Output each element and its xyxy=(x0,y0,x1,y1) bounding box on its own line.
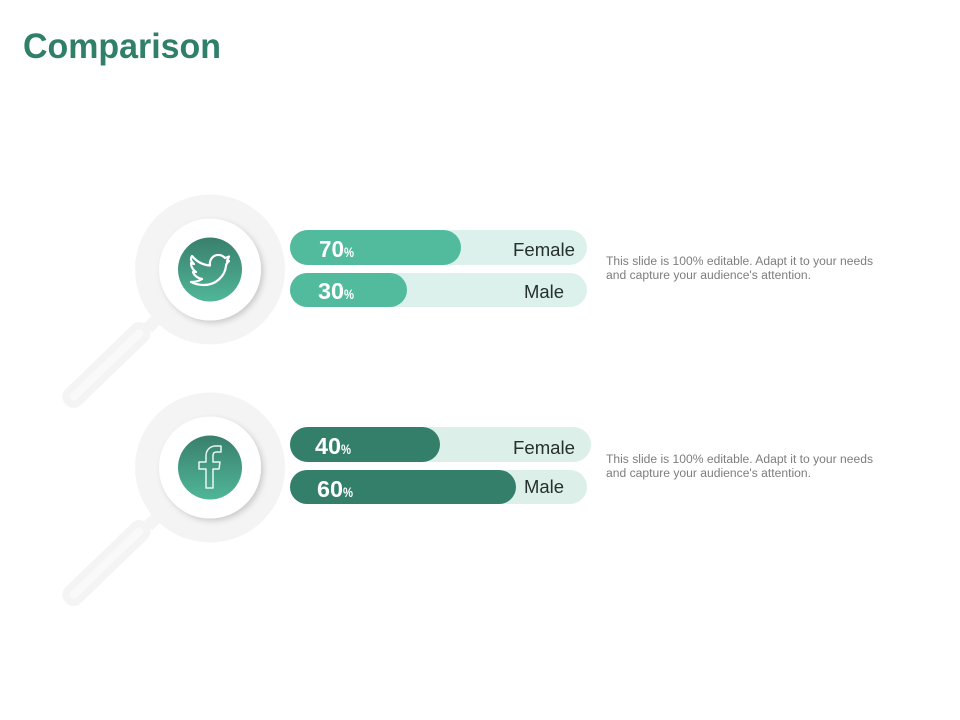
bar: facebook female 40%: % xyxy=(341,441,351,457)
icon: twitter bird xyxy=(178,238,242,302)
description: twitter: and capture your audience's attention. xyxy=(606,270,811,282)
description: facebook: and capture your audience's attention. xyxy=(606,468,811,480)
bar: facebook male 60%: % xyxy=(343,484,353,500)
bar: twitter female 70%: 70 xyxy=(319,236,344,262)
bar: twitter male 30%: 30 xyxy=(318,278,344,304)
magnifier: facebook xyxy=(58,392,285,610)
bar: facebook female 40%: 40 xyxy=(315,433,341,459)
bar: twitter female 70% xyxy=(290,230,587,265)
icon: facebook f xyxy=(178,436,242,500)
title: Comparison xyxy=(23,27,221,66)
magnifier handle xyxy=(58,514,160,610)
magnifier: twitter xyxy=(58,194,285,412)
bar: twitter female 70%: % xyxy=(344,244,354,260)
magnifier ring xyxy=(135,392,285,542)
bar: facebook male 60%: 60 xyxy=(317,476,343,502)
magnifier lens xyxy=(159,218,261,320)
bar: facebook male 60% xyxy=(290,470,587,504)
bar: twitter female 70%: Female xyxy=(513,240,575,260)
bar: facebook female 40% xyxy=(290,427,591,462)
magnifier handle xyxy=(58,316,160,412)
description: twitter: This slide is 100% editable. Adapt it to your needs xyxy=(606,256,873,268)
bar: twitter male 30% xyxy=(290,273,587,307)
bar: twitter male 30%: % xyxy=(344,286,354,302)
bar: facebook female 40%: Female xyxy=(513,438,575,458)
bar: facebook male 60%: Male xyxy=(524,477,564,497)
description: facebook: This slide is 100% editable. Adapt it to your needs xyxy=(606,454,873,466)
bar: twitter male 30%: Male xyxy=(524,282,564,302)
magnifier lens xyxy=(159,416,261,518)
magnifier ring xyxy=(135,194,285,344)
